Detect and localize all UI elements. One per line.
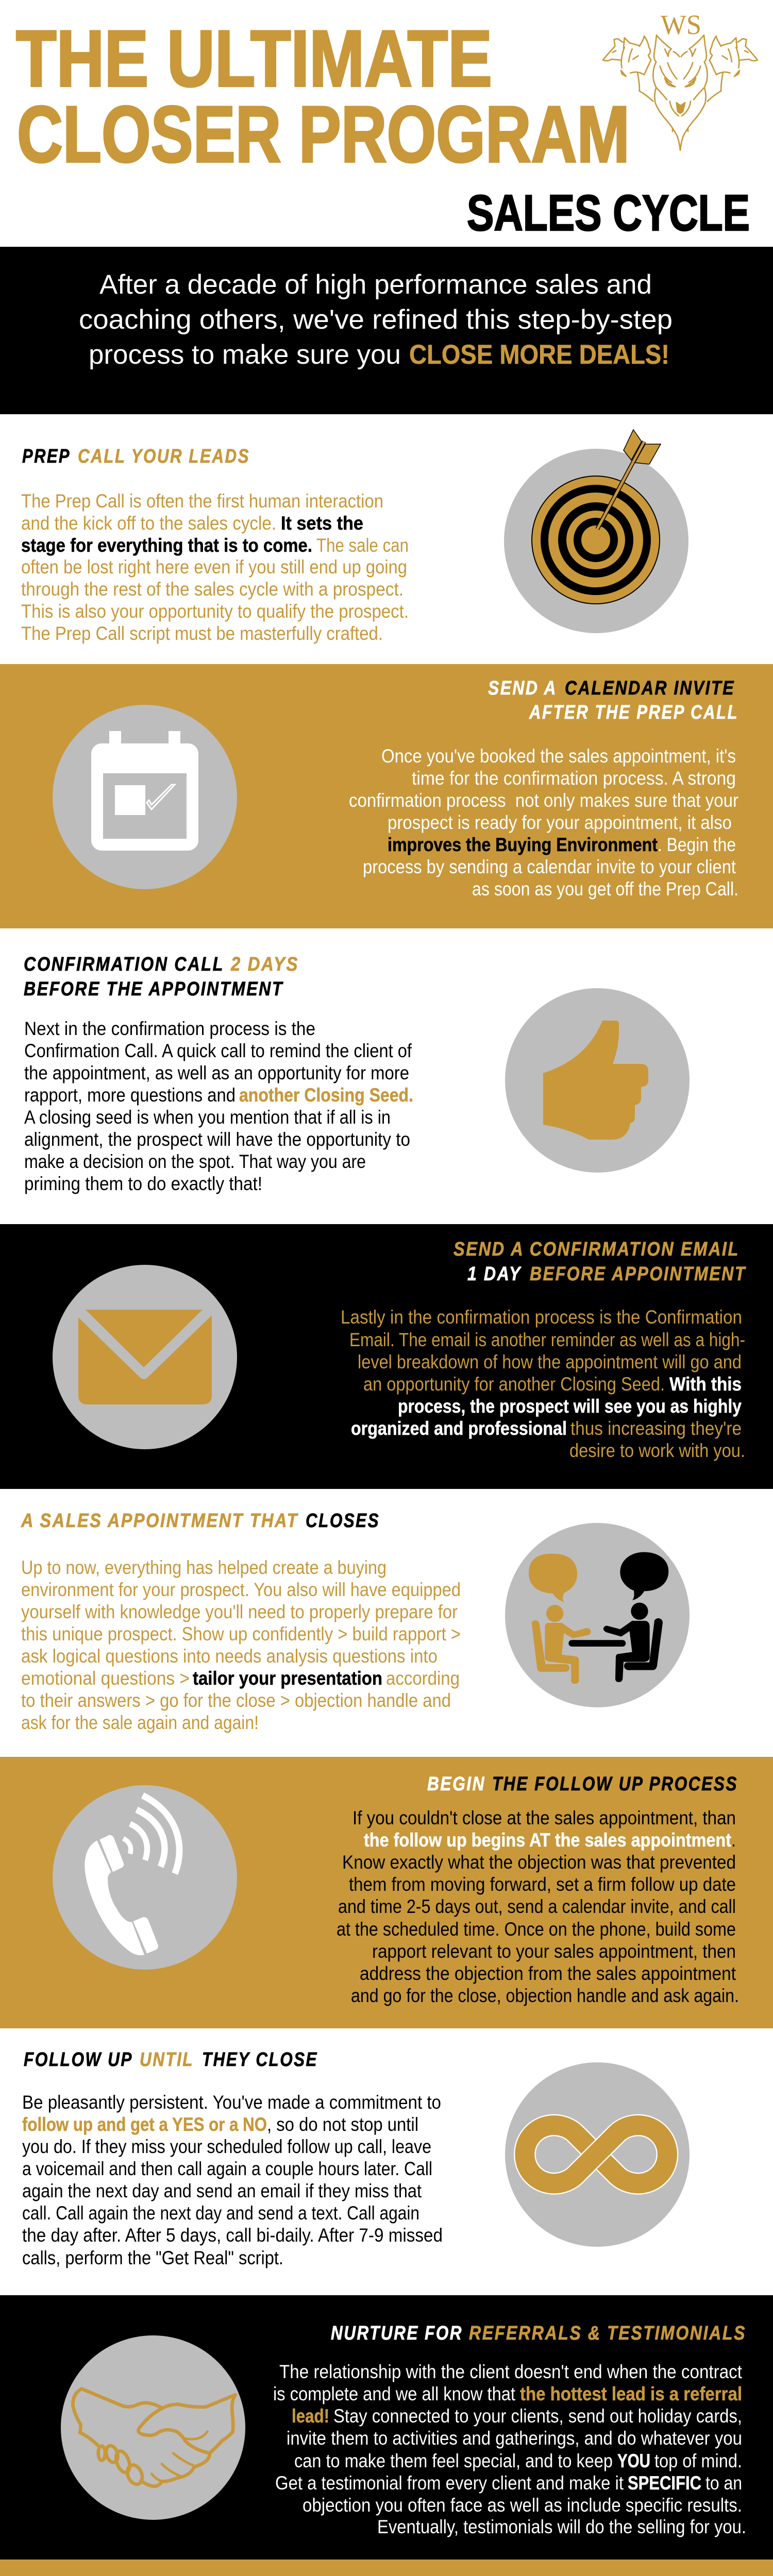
heading: confirmation call 2 days: 2 DAYS	[230, 954, 299, 975]
intro text: coaching others, we've refined this step-by-step	[79, 304, 673, 335]
body text: confirmation call	[24, 1018, 413, 1194]
panel: follow up until they close	[0, 2028, 773, 2295]
body text: sales appointment	[21, 1557, 461, 1733]
panel: confirmation email	[0, 1224, 773, 1489]
body text: prep call	[21, 490, 409, 644]
intro text: After a decade of high performance sales and	[99, 269, 652, 300]
body text: follow up until they close: Be pleasantly persistent. You've made a commitment to	[22, 2092, 441, 2113]
body text: follow up until they close: call. Call again the next day and send a text. Call again	[22, 2202, 419, 2224]
heading: prep call your leads: PREP	[22, 446, 71, 467]
intro text	[79, 269, 673, 370]
heading: confirmation call 2 days: BEFORE THE APPOINTMENT	[24, 978, 283, 1000]
body text: follow up process: rapport relevant to your sales appointment, then	[372, 1941, 736, 1962]
body text: calendar invite	[349, 745, 738, 900]
body text: follow up process: .	[731, 1829, 736, 1851]
body text: follow up until they close	[22, 2092, 443, 2268]
title: CLOSER PROGRAM	[17, 90, 630, 179]
body text: follow up until they close: again the next day and send an email if they miss that	[22, 2180, 422, 2201]
heading: send a calendar invite: SEND A	[488, 677, 557, 699]
icon: target with arrow	[504, 430, 688, 633]
heading: confirmation call 2 days: CONFIRMATION CALL	[24, 954, 224, 975]
body text: prep call: through the rest of the sales cycle with a prospect.	[21, 579, 404, 600]
title: THE ULTIMATE	[16, 14, 492, 103]
body text: confirmation email: With this	[669, 1374, 742, 1395]
heading: nurture for referrals	[331, 2323, 746, 2344]
heading: send a calendar invite	[488, 677, 738, 723]
icon: ringing phone	[53, 1785, 237, 1970]
body text: nurture: top of mind.	[654, 2450, 742, 2471]
body text: nurture: the hottest lead is a referral	[520, 2383, 742, 2404]
body text: confirmation email: organized and professional	[351, 1418, 567, 1439]
body text: calendar invite: process by sending a calendar invite to your client	[363, 856, 736, 877]
body text: calendar invite: as soon as you get off the Prep Call.	[472, 878, 738, 900]
body text: confirmation call: another Closing Seed.	[239, 1084, 413, 1106]
body text: follow up process: address the objection from the sales appointment	[360, 1963, 736, 1984]
body text: prep call: It sets the	[281, 513, 363, 534]
body text: calendar invite: improves the Buying Environment	[388, 834, 658, 855]
body text: follow up until they close: , so do not stop until	[267, 2114, 418, 2135]
body text: sales appointment: ask for the sale again and again!	[21, 1712, 259, 1733]
body text: sales appointment: ask logical questions into needs analysis questions into	[21, 1646, 438, 1667]
icon: handshake	[61, 2335, 245, 2520]
body text: follow up until they close: you do. If they miss your scheduled follow up call, leave	[22, 2136, 431, 2157]
body text: confirmation email: desire to work with you.	[569, 1440, 745, 1461]
icon: envelope	[53, 1265, 237, 1449]
body text: confirmation call: rapport, more questions and	[24, 1084, 236, 1106]
icon: thumbs up	[505, 988, 690, 1173]
intro panel	[0, 247, 773, 414]
panel: confirmation call	[0, 928, 773, 1224]
body text: sales appointment: emotional questions >	[21, 1668, 190, 1689]
body text: follow up process	[337, 1807, 739, 2006]
heading: confirmation call 2 days	[24, 954, 299, 1000]
body text: follow up process: them from moving forward, set a firm follow up date	[349, 1874, 736, 1895]
intro text: CLOSE MORE DEALS!	[409, 340, 669, 370]
body text: prep call: The sale can	[316, 535, 409, 556]
body text: prep call: The Prep Call is often the first human interaction	[21, 490, 383, 512]
body text: confirmation email: thus increasing they're	[570, 1418, 742, 1439]
body text: nurture	[273, 2361, 746, 2537]
body text: confirmation call: alignment, the prospect will have the opportunity to	[24, 1129, 410, 1150]
body text: nurture: is complete and we all know that	[273, 2383, 516, 2404]
body text: prep call: This is also your opportunity to qualify the prospect.	[21, 601, 409, 622]
icon: infinity	[505, 2062, 690, 2247]
body text: nurture: SPECIFIC	[628, 2472, 701, 2494]
heading: send a calendar invite: CALENDAR INVITE	[565, 677, 735, 699]
heading: follow up until they close: FOLLOW UP	[24, 2049, 133, 2071]
panel: begin the follow up process	[0, 1757, 773, 2028]
body text: follow up process: the follow up begins AT the sales appointment	[364, 1829, 731, 1851]
heading: send a confirmation email	[453, 1239, 746, 1285]
body text: confirmation email: an opportunity for another Closing Seed.	[363, 1374, 665, 1395]
body text: confirmation call: the appointment, as well as an opportunity for more	[24, 1062, 409, 1083]
gold divider band	[0, 2560, 773, 2576]
heading: prep call your leads: CALL YOUR LEADS	[78, 446, 250, 467]
body text: calendar invite: Once you've booked the sales appointment, it's	[381, 745, 736, 767]
body text: prep call: The Prep Call script must be masterfully crafted.	[21, 623, 383, 644]
body text: sales appointment: according	[386, 1668, 460, 1689]
title	[16, 14, 630, 179]
body text: nurture: to an	[705, 2472, 742, 2494]
intro text: process to make sure you	[89, 340, 401, 370]
body text: follow up until they close: the day after. After 5 days, call bi-daily. After 7-9 missed	[22, 2225, 443, 2246]
logo: wolf syndicate, gold: WS	[661, 9, 701, 40]
header panel	[0, 0, 773, 247]
heading: a sales appointment that closes: A SALES APPOINTMENT THAT	[21, 1510, 298, 1532]
body text: sales appointment: Up to now, everything has helped create a buying	[21, 1557, 386, 1578]
heading: follow up until they close	[24, 2049, 318, 2071]
body text: follow up process: Know exactly what the objection was that prevented	[342, 1852, 736, 1873]
body text: calendar invite: time for the confirmation process. A strong	[412, 768, 736, 789]
heading: nurture for referrals: NURTURE FOR	[331, 2323, 463, 2344]
body text: confirmation call: Next in the confirmation process is the	[24, 1018, 315, 1039]
body text: confirmation email	[341, 1307, 745, 1461]
panel: nurture for referrals and testimonials	[0, 2295, 773, 2560]
heading: a sales appointment that closes: CLOSES	[306, 1510, 380, 1532]
body text: calendar invite: . Begin the	[658, 834, 736, 855]
heading: prep call your leads	[22, 446, 250, 467]
body text: nurture: can to make them feel special, and to keep	[294, 2450, 613, 2471]
body text: sales appointment: environment for your prospect. You also will have equipped	[21, 1579, 461, 1600]
body text: calendar invite: confirmation process not only makes sure that your	[349, 790, 738, 811]
panel: calendar invite	[0, 664, 773, 928]
body text: confirmation call: A closing seed is when you mention that if all is in	[24, 1107, 391, 1128]
body text: sales appointment: this unique prospect. Show up confidently > build rapport >	[21, 1623, 461, 1645]
body text: sales appointment: tailor your presentation	[193, 1668, 382, 1689]
heading: follow up until they close: THEY CLOSE	[202, 2049, 318, 2071]
body text: nurture: Get a testimonial from every client and make it	[275, 2472, 624, 2494]
body text: prep call: often be lost right here even if you still end up going	[21, 556, 407, 578]
body text: nurture: lead!	[292, 2405, 329, 2427]
body text: prep call: stage for everything that is to come.	[21, 535, 312, 556]
body text: confirmation call: priming them to do exactly that!	[24, 1173, 262, 1194]
body text: sales appointment: to their answers > go for the close > objection handle and	[21, 1690, 451, 1711]
body text: follow up process: If you couldn't close at the sales appointment, than	[352, 1807, 736, 1828]
logo: wolf syndicate, gold	[603, 9, 758, 150]
body text: prep call: and the kick off to the sales cycle.	[21, 513, 276, 534]
panel: prep call	[0, 414, 773, 664]
heading: follow up until they close: UNTIL	[140, 2049, 194, 2071]
icon: calendar	[53, 705, 237, 889]
body text: follow up until they close: calls, perform the "Get Real" script.	[22, 2247, 283, 2268]
body text: follow up until they close: follow up and get a YES or a NO	[22, 2114, 267, 2135]
body text: calendar invite: prospect is ready for your appointment, it also	[388, 812, 732, 833]
body text: nurture: YOU	[617, 2450, 650, 2471]
body text: confirmation call: Confirmation Call. A quick call to remind the client of	[24, 1040, 412, 1061]
panel: sales appointment	[0, 1489, 773, 1757]
body text: follow up until they close: a voicemail and then call again a couple hours later. Call	[22, 2158, 432, 2179]
icon: two people talking at a table	[505, 1523, 690, 1707]
heading: send a confirmation email: 1 DAY	[467, 1263, 522, 1285]
heading: begin the follow up process: BEGIN	[427, 1773, 485, 1795]
body text: sales appointment: yourself with knowledge you'll need to properly prepare for	[21, 1601, 458, 1622]
body text: confirmation call: make a decision on the spot. That way you are	[24, 1151, 366, 1172]
